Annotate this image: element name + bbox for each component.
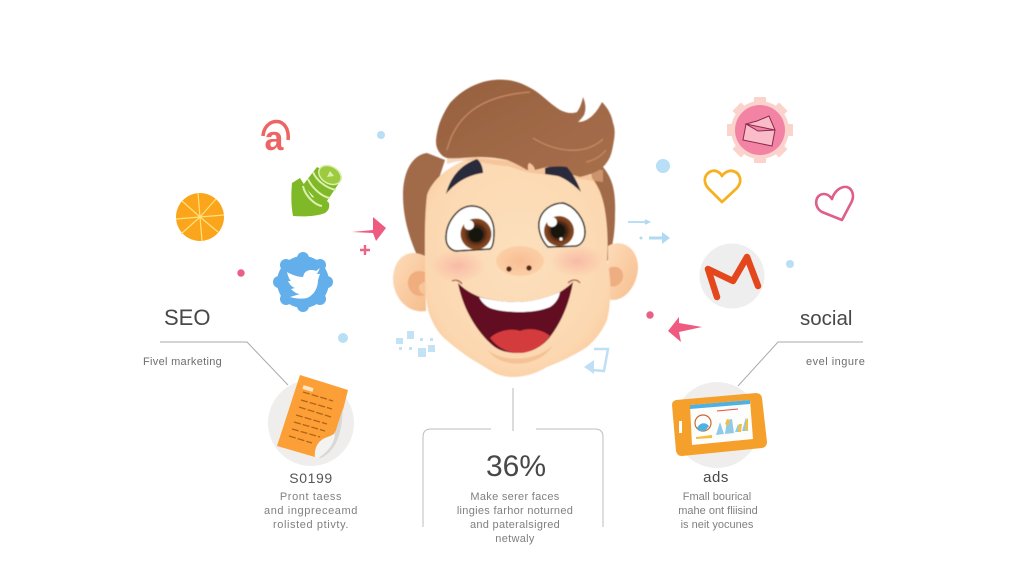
left eyebrow: [446, 159, 483, 194]
description: rolisted ptivty.: [273, 519, 349, 531]
arrow: blue return: [584, 349, 608, 374]
description: and ingpreceamd: [264, 505, 358, 517]
box outline: [423, 429, 603, 527]
panel: SEO document: [264, 375, 358, 531]
icon: letter a: a: [265, 120, 285, 158]
description: Pront taess: [280, 491, 342, 503]
leader line: social: [738, 342, 863, 386]
description: mahe ont fliisind: [678, 505, 758, 517]
right eye: [539, 203, 585, 247]
front hair: [436, 80, 615, 177]
description: Make serer faces: [470, 491, 560, 503]
dot: [338, 333, 348, 343]
hair highlight: [447, 92, 606, 162]
dot: [786, 260, 794, 268]
description: netwaly: [495, 533, 535, 545]
document icon: [277, 375, 348, 458]
icon: orange citrus: [176, 193, 224, 241]
document backdrop circle: [268, 380, 354, 466]
icon: twitter gear: [273, 252, 333, 312]
decoration: blue squares: [396, 331, 435, 357]
label: evel ingure: evel ingure: [806, 356, 865, 368]
panel: 36% stat box: [423, 429, 603, 545]
face shape: [425, 152, 610, 377]
description: Fmall bourical: [683, 491, 751, 503]
title: S0199: S0199: [289, 470, 333, 486]
blush right: [550, 245, 604, 277]
heading: SEO: SEO: [164, 305, 210, 330]
character face: [393, 80, 638, 377]
icon: envelope gear: [727, 97, 793, 163]
icon: plus: [360, 245, 370, 255]
arrows: blue: [628, 220, 670, 244]
right ear: [608, 243, 638, 300]
stat: 36%: 36%: [486, 450, 546, 483]
open mouth: [452, 280, 580, 353]
icon: green coin arrow: [291, 162, 345, 216]
icon: M badge: [700, 244, 764, 308]
tablet backdrop circle: [674, 382, 760, 468]
arrow: pink left: [668, 317, 702, 342]
title: ads: ads: [703, 469, 729, 486]
icon: yellow heart: [705, 171, 740, 202]
right eyebrow: [545, 166, 581, 192]
connector: face to stat box: [512, 388, 514, 431]
left ear: [393, 253, 426, 311]
description: is neit yocunes: [681, 519, 754, 531]
leader line: SEO: [160, 342, 288, 385]
hairline shadow: [447, 155, 603, 182]
tablet icon: [672, 393, 767, 456]
label: Fivel marketing: Fivel marketing: [143, 356, 222, 368]
dot: [237, 269, 245, 277]
blush left: [430, 249, 486, 283]
dot: [646, 311, 654, 319]
arrow: pink right: [352, 217, 386, 241]
left eye: [446, 206, 494, 251]
dot: [377, 131, 385, 139]
icon: pink heart: [816, 187, 853, 220]
dot: [656, 159, 670, 173]
panel: ads tablet: [672, 382, 767, 531]
back hair: [403, 153, 615, 272]
heading: social: social: [800, 307, 852, 330]
description: and pateralsigred: [470, 519, 560, 531]
description: lingies farhor noturned: [457, 505, 573, 517]
chin shadow: [487, 345, 553, 364]
nose: [496, 246, 544, 276]
